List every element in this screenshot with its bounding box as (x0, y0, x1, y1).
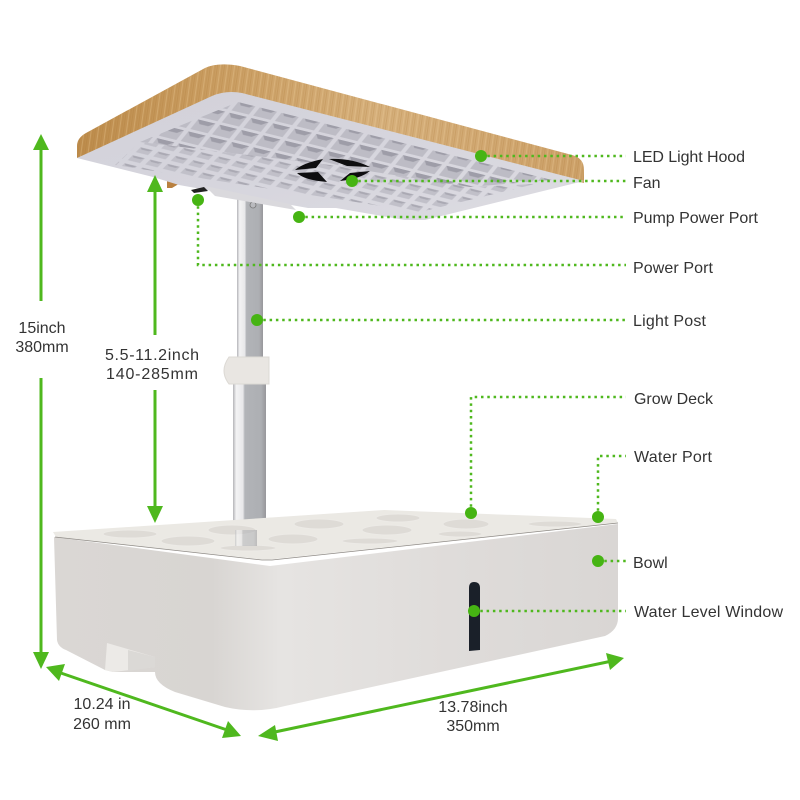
grow deck (53, 510, 618, 560)
post height label: 5.5-11.2inch (105, 347, 199, 364)
length label: 350mm (446, 718, 500, 735)
callout: Fan: Fan (633, 175, 661, 192)
water level window (469, 582, 480, 651)
bowl body (54, 524, 618, 710)
callout: Bowl (592, 555, 668, 572)
callout: Pump Power Port (293, 210, 759, 227)
width label: 260 mm (73, 716, 131, 733)
callout: Power Port (192, 194, 714, 277)
hood underside (77, 92, 584, 220)
post lower segment (235, 530, 257, 546)
callout: Water Level Window: Water Level Window (634, 604, 783, 621)
width arrow (46, 664, 241, 738)
callout: Power Port: Power Port (633, 260, 714, 277)
LED light hood (77, 64, 584, 220)
post height arrow (147, 175, 163, 523)
mount plate (205, 186, 296, 210)
callout: Light Post: Light Post (633, 313, 707, 330)
callout: Water Port (592, 449, 713, 523)
callout: Fan (346, 175, 661, 192)
callout: Water Level Window (468, 604, 783, 621)
height arrow: 15 inch (33, 134, 49, 669)
callout: Bowl: Bowl (633, 555, 668, 572)
callout: Water Port: Water Port (634, 449, 713, 466)
length arrow (258, 653, 624, 741)
length label: 13.78inch (438, 699, 508, 716)
bowl (53, 510, 618, 710)
handle notch (105, 643, 155, 672)
callout: LED Light Hood (475, 149, 745, 166)
height label (15, 320, 69, 356)
back tab (167, 178, 182, 188)
vent grid (140, 102, 552, 187)
height label: 15inch (18, 320, 66, 337)
fan (295, 159, 370, 182)
callout: Light Post (251, 313, 707, 330)
width label: 10.24 in (74, 696, 130, 713)
length label (438, 699, 508, 735)
pods (103, 514, 582, 551)
callout: Pump Power Port: Pump Power Port (633, 210, 759, 227)
callout: Grow Deck: Grow Deck (634, 391, 714, 408)
width label (73, 696, 131, 733)
callout: LED Light Hood: LED Light Hood (633, 149, 745, 166)
light post (233, 198, 266, 522)
callout: Grow Deck (465, 391, 714, 519)
post height label (105, 347, 199, 383)
deck seam (55, 523, 618, 560)
height label: 380mm (15, 339, 69, 356)
power socket (191, 187, 208, 193)
post clamp (224, 357, 269, 384)
wood shell (77, 64, 584, 183)
post height label: 140-285mm (106, 366, 198, 383)
